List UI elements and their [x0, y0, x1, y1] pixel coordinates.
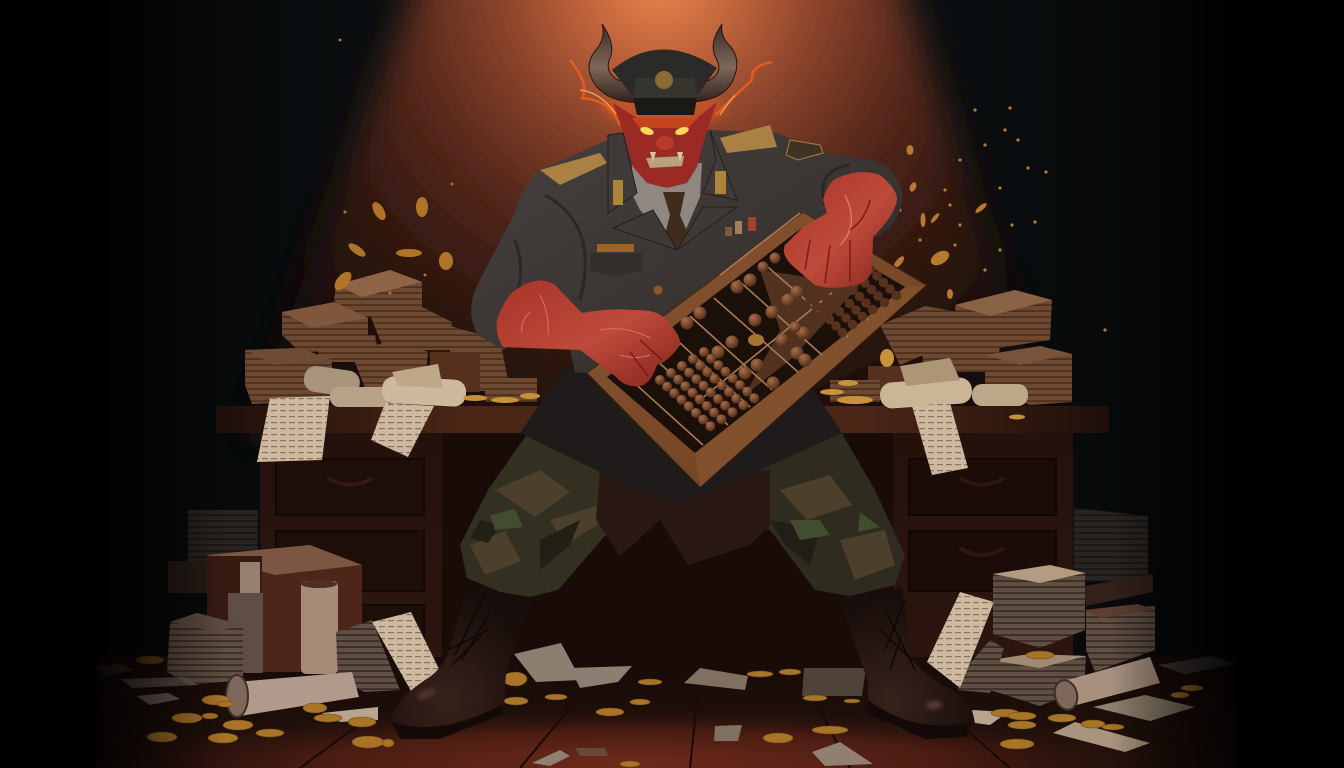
lower jacket tails: [596, 470, 770, 565]
frame shadow edge: [695, 285, 926, 487]
jacket right lapel: [677, 207, 737, 250]
hanging paper left: [257, 396, 330, 462]
epaulette right: [720, 125, 777, 153]
orange spotlight on the wall: [240, 0, 1060, 445]
left camouflage trouser leg: [460, 430, 680, 597]
horns: [589, 24, 737, 102]
right floor clutter: [532, 508, 1236, 766]
necktie: [663, 192, 690, 250]
right camouflage trouser leg: [700, 430, 905, 596]
right pedestal: [893, 432, 1073, 657]
centre floor papers: [514, 643, 632, 688]
flame glow: [602, 88, 726, 128]
right desk scrolls: [879, 377, 973, 409]
jacket skirt: [520, 368, 842, 505]
cardboard box: [207, 545, 362, 672]
rear stack: [1074, 508, 1148, 582]
left stacks of paper on the desk: [245, 270, 537, 404]
abacus rods: [620, 213, 868, 445]
hanging paper right: [912, 403, 968, 475]
name tag: [597, 244, 634, 252]
abacus frame: [587, 212, 926, 487]
right combat boot: [838, 588, 972, 739]
lower bead cluster: [655, 347, 759, 431]
loose sheets: [96, 664, 378, 722]
abacus: [587, 212, 926, 487]
jacket button: [654, 286, 662, 294]
jacket left collar: [608, 133, 637, 213]
left combat boot: [392, 586, 532, 739]
shoulder patch: [786, 140, 823, 160]
loose sheets: [532, 656, 1236, 766]
abacus interior: [607, 227, 905, 453]
left pedestal: [260, 432, 442, 657]
floating gold coins left: [331, 38, 454, 294]
right red forearm and fist: [784, 172, 897, 288]
shirt collar: [630, 163, 702, 250]
desk: [216, 406, 1109, 668]
scrolls and loose sheets on the desk: [257, 349, 1028, 475]
paper stack: [167, 613, 243, 685]
floor gold coins: [136, 651, 1203, 767]
floor scroll: [1051, 657, 1160, 712]
demon face: [613, 102, 717, 188]
loose beads: [680, 252, 812, 390]
right stacks of paper on the desk: [830, 290, 1072, 405]
upper bead cluster: [805, 258, 901, 337]
floor scroll: [226, 672, 359, 717]
medal ribbons: [725, 217, 756, 236]
dark rear stack: [188, 510, 258, 565]
jacket left lapel: [613, 210, 677, 250]
sleeve folds: [505, 165, 850, 320]
ledger sheet: [927, 592, 994, 688]
left desk scrolls: [302, 364, 361, 398]
gold coin caught in abacus: [748, 334, 764, 346]
flames around the head: [570, 60, 772, 125]
upright scroll: [301, 580, 338, 674]
hanging paper centre-left: [371, 403, 434, 457]
desk top: [216, 406, 1109, 433]
epaulette left: [540, 153, 607, 185]
collar insignia: [613, 171, 726, 205]
low stack: [958, 640, 1086, 706]
wooden floor: [96, 655, 1236, 768]
officer cap: [612, 49, 717, 115]
right drawers: [909, 459, 1056, 591]
officer figure: [392, 24, 972, 739]
flying coins and sparks right: [892, 106, 1107, 332]
jacket right collar: [703, 130, 737, 200]
paper stack by boot: [336, 620, 400, 692]
interior desk seen through frame: [745, 270, 860, 395]
upright binder: [228, 593, 263, 673]
desk gold coins: [463, 349, 1025, 420]
pocket flap: [590, 253, 642, 277]
blueprint sheet: [372, 612, 440, 691]
left drawers: [276, 459, 424, 655]
desk recess: [442, 432, 894, 668]
right edge shadow: [1110, 0, 1236, 768]
left red forearm and fist: [497, 280, 680, 386]
left floor clutter: [96, 510, 440, 722]
jacket torso and sleeves: [471, 130, 903, 385]
left edge shadow: [96, 0, 226, 768]
tall stack: [993, 565, 1085, 648]
